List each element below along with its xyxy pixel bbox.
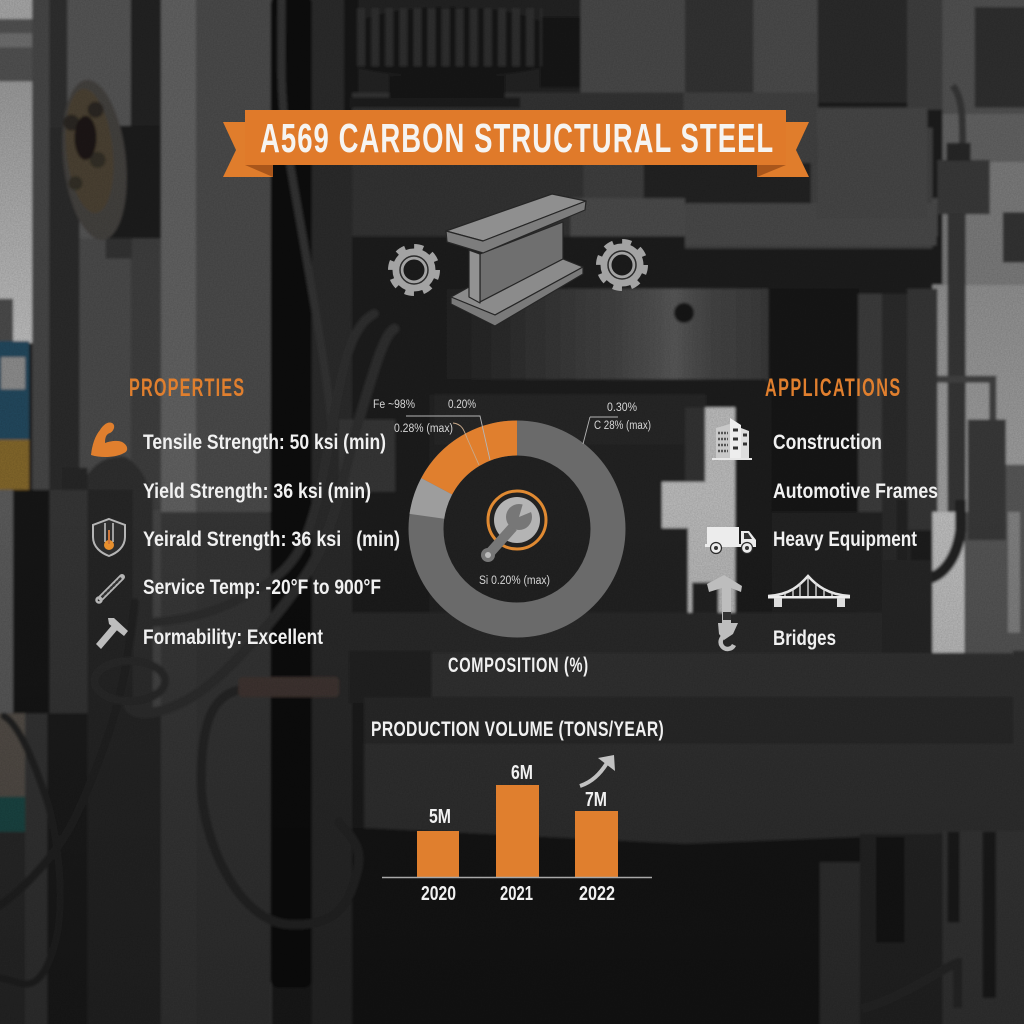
bar 2020 [417,831,459,877]
heading: composition: COMPOSITION (%) [448,652,588,677]
label: 0.20%: 0.20% [448,399,476,411]
icon: muscle arm [91,422,127,457]
label: Si max: Si 0.20% (max) [479,575,550,587]
icon: building [712,418,752,460]
panel: properties [91,375,400,649]
chart title: PRODUCTION VOLUME (TONS/YEAR) [371,717,664,741]
icon: wrench in ring [481,491,546,562]
text: formability: Formability: Excellent [143,625,323,649]
donut ring [426,438,608,620]
chart: composition donut [373,399,651,677]
label: 0.28% max: 0.28% (max) [394,423,453,435]
text: yield strength: Yield Strength: 36 ksi (min) [143,479,371,503]
panel: applications [705,375,938,650]
arrow: upward trend [580,755,615,786]
text: bridges: Bridges [773,626,836,650]
icon: thermometer stick [96,577,122,602]
value 5M: 5M [429,806,451,828]
bar 2021 [496,785,539,877]
text: automotive frames: Automotive Frames [773,479,938,503]
icon: bridge [768,576,850,607]
icon: steel I-beam with gears [390,194,646,326]
icon: hammer [96,618,128,649]
text: yield strength duplicate: Yeirald Strength: 36 ksi (min) [143,527,400,551]
icon: crane hook [707,575,742,649]
title banner [223,110,809,177]
icon: I-beam [446,194,586,326]
title text: A569 CARBON STRUCTURAL STEEL [260,116,773,161]
value 6M: 6M [511,762,533,784]
icon: right gear [598,242,646,288]
label: C max: C 28% (max) [594,420,651,432]
chart: production volume [371,717,664,905]
text: service temp: Service Temp: -20°F to 900°F [143,575,381,599]
leader lines [406,416,618,465]
icon: shield thermometer [93,519,125,556]
text: tensile strength: Tensile Strength: 50 ksi (min) [143,430,386,454]
year 2021: 2021 [500,883,533,905]
label: Fe: Fe ~98% [373,399,415,411]
year 2020: 2020 [421,883,456,905]
icon: truck [705,527,756,554]
axis line [382,876,652,878]
heading: properties: PROPERTIES [129,375,244,402]
text: heavy equipment: Heavy Equipment [773,527,917,551]
icon: left gear [390,246,438,294]
value 7M: 7M [585,789,607,811]
bar 2022 [575,811,618,877]
text: construction: Construction [773,430,882,454]
year 2022: 2022 [579,883,615,905]
label: 0.30%: 0.30% [607,402,637,414]
heading: applications: APPLICATIONS [765,375,900,402]
